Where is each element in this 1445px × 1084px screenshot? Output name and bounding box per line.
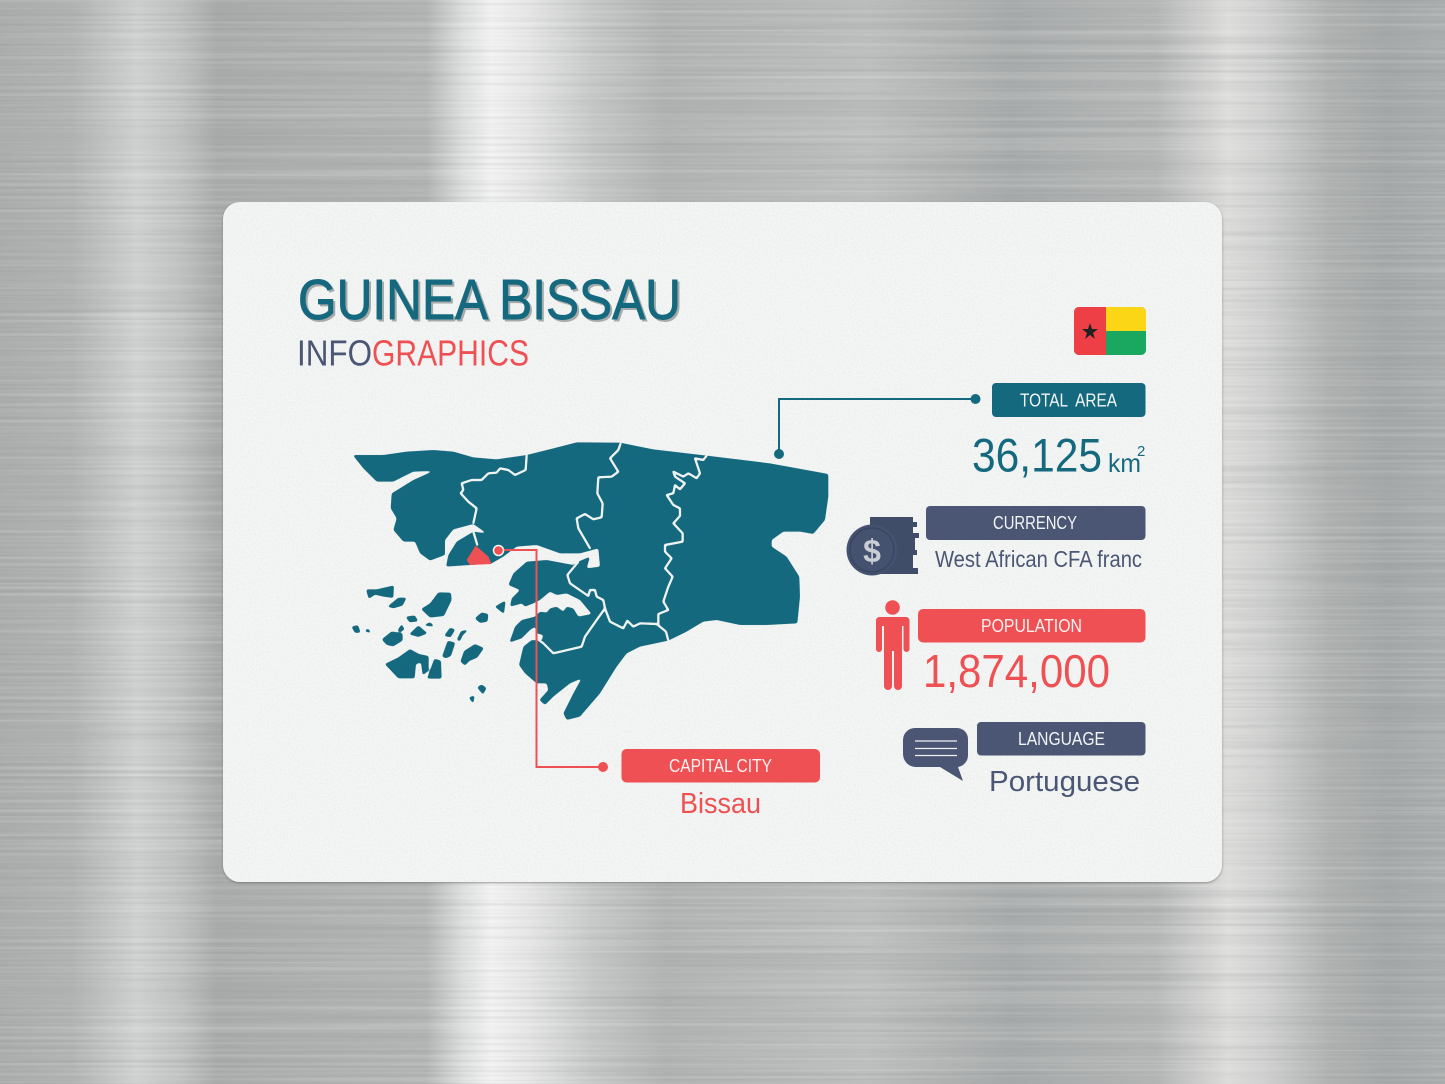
total area value: km xyxy=(1108,448,1141,478)
capital region xyxy=(467,546,492,565)
population label: POPULATION xyxy=(981,616,1082,636)
title: GUINEA BISSAU xyxy=(298,268,681,332)
connector: total area xyxy=(774,394,980,459)
mainland and islands xyxy=(351,442,828,720)
language label: LANGUAGE xyxy=(1018,729,1105,749)
language label xyxy=(977,722,1146,756)
population value: 1,874,000 xyxy=(923,645,1110,697)
region borders xyxy=(461,443,707,653)
icon: speech bubble xyxy=(903,728,968,781)
language value: Portuguese xyxy=(989,766,1140,798)
icon: coin stack xyxy=(846,517,919,576)
total area value: 36,125 xyxy=(972,428,1102,482)
total area label: TOTAL AREA xyxy=(1020,390,1117,410)
capital city label: CAPITAL CITY xyxy=(669,756,772,776)
map of Guinea-Bissau xyxy=(351,442,828,720)
currency value: West African CFA franc xyxy=(935,546,1142,572)
currency label: CURRENCY xyxy=(993,513,1077,533)
connector: capital city xyxy=(494,546,608,772)
icon: flag of Guinea-Bissau xyxy=(1074,307,1146,355)
total area value: 2 xyxy=(1137,443,1145,460)
currency label xyxy=(926,506,1146,540)
population label xyxy=(918,609,1146,642)
total area label xyxy=(992,383,1146,417)
icon: person xyxy=(876,600,910,690)
subtitle xyxy=(297,332,529,374)
icon: coin stack: $ xyxy=(863,533,881,569)
panel: white card xyxy=(223,202,1222,882)
capital city label xyxy=(622,749,820,782)
subtitle: GRAPHICS xyxy=(372,332,529,374)
capital city value: Bissau xyxy=(680,788,761,820)
subtitle: INFO xyxy=(297,332,372,374)
